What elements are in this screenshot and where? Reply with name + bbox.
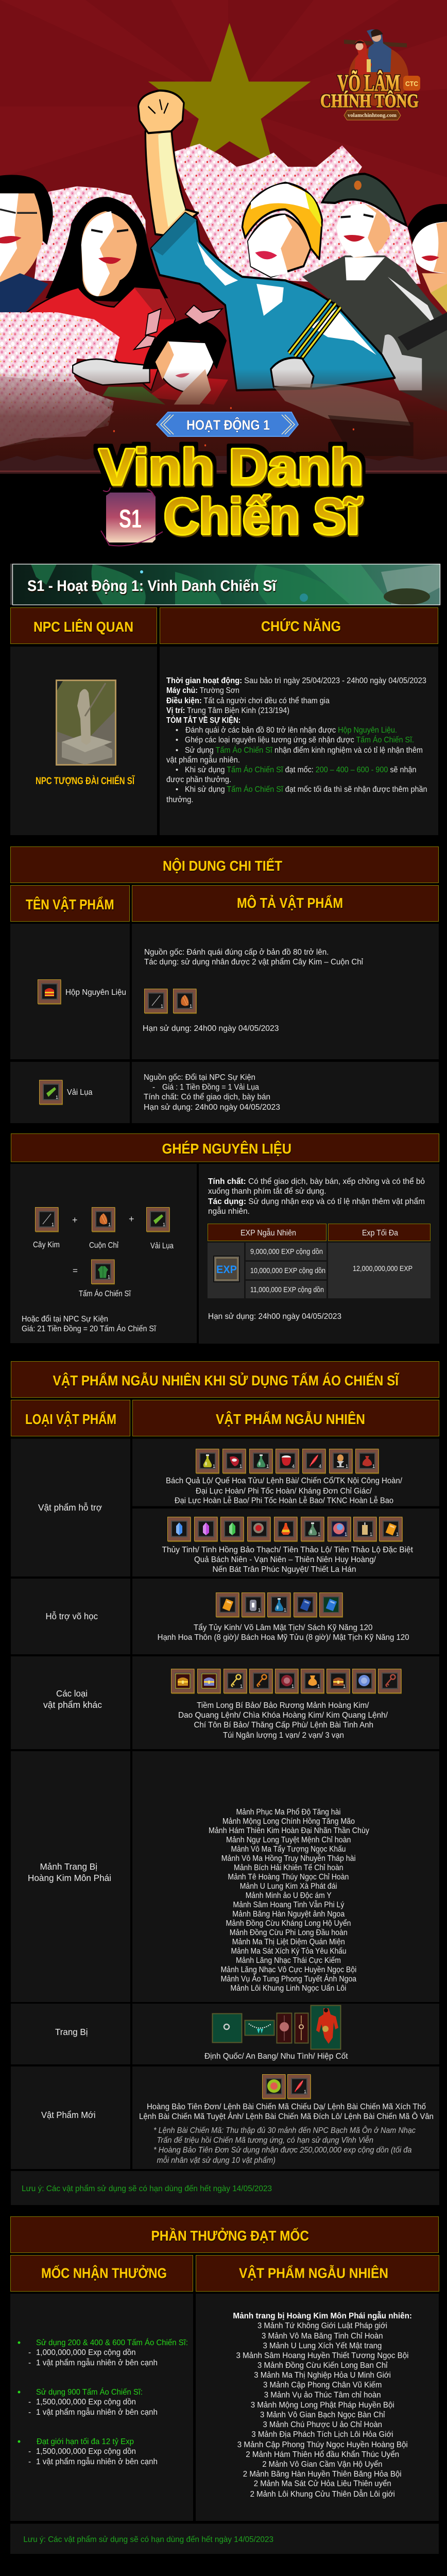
badge: S1: S1 [119,504,142,533]
icons row [196,1449,379,1474]
row: danh sách mảnh trang bị: Mảnh Vô Ma Tẩy Tượng Ngọc Khấu [231,1845,346,1854]
icon: tấm áo chiến sĩ: 1 [108,1275,110,1280]
equals: = [73,1266,78,1276]
row: danh sách mảnh trang bị: Mảnh U Lung Kim Xà Phát đái [240,1882,337,1891]
icons row: 1 [346,1464,348,1469]
EXP table: 11,000,000 EXP cộng dồn [250,1285,324,1294]
title: Chiến Sĩ: Chiến Sĩ [164,488,363,545]
row: danh sách mảnh trang bị: Mảnh Lôi Khung Linh Ngọc Uẩn Lôi [230,1984,346,1993]
icon: vải lụa [39,1080,63,1105]
italic notes: * Hoàng Bảo Tiên Đơn Sử dụng nhận được 250,000,000 exp cộng dồn (tối đa [153,2146,412,2155]
header: mô tả vật phẩm: MÔ TẢ VẬT PHẨM [237,894,343,911]
icon: vải lụa [146,1208,170,1232]
row: danh sách mảnh trang bị: Mảnh Đồng Cừu Phi Long Đầu hoàn [230,1928,348,1937]
items text: Tiềm Long Bí Bảo/ Bảo Rương Mảnh Hoàng Kim/ [197,1701,369,1710]
header: vật phẩm ngẫu nhiên khi sử dụng [11,1361,439,1397]
milestone 12 tỷ [18,2437,158,2466]
header: vật phẩm ngẫu nhiên: VẬT PHẨM NGẪU NHIÊN [216,1411,365,1427]
exchange note [22,1315,157,1333]
row: danh sách mảnh trang bị: Mảnh Phục Ma Phổ Độ Tăng hài [236,1808,341,1817]
row: danh sách mảnh trang bị: Mảnh Băng Hàn Nguyệt ảnh Ngoa [232,1910,345,1919]
panel: phần thưởng mảnh trang bị: 3 Mảnh Chú Phược U ảo Chỉ Hoàn [263,2420,382,2429]
panel: chức năng text: được phần thưởng. [166,775,231,784]
right woman [408,204,447,312]
logo Võ Lâm Chính Tông [320,29,420,120]
row: danh sách mảnh trang bị: Mảnh Ngự Long Tuyệt Mệnh Chỉ hoàn [226,1836,351,1844]
items text: Hạnh Hoa Thôn (8 giờ)/ Bách Hoa Mỹ Tửu (8 giờ)/ Mật Tịch Kỹ Năng 120 [158,1633,409,1642]
icons row: 1 [213,1464,215,1469]
italic notes [153,2126,416,2165]
items text [158,1623,409,1642]
icons row: 1 [317,1684,320,1689]
header: NPC liên quan [10,608,157,644]
icon: áo giáp [311,2005,341,2049]
panel: hộp nguyên liệu name [10,924,130,1059]
EXP table [208,1224,431,1298]
material names: Cuộn Chỉ [89,1241,118,1250]
NPC name: NPC TƯỢNG ĐÀI CHIẾN SĨ [36,775,135,787]
header: vật phẩm ngẫu nhiên: VẬT PHẨM NGẪU NHIÊN [239,2265,388,2281]
logo Võ Lâm Chính Tông: CTC [405,80,419,88]
icon: vải lụa: 1 [163,1222,165,1227]
panel: chức năng text: TÓM TẮT VỀ SỰ KIỆN: [166,716,240,725]
caption: Định Quốc/ An Bang/ Nhu Tình/ Hiệp Cốt [204,2052,348,2061]
note box 2: Lưu ý: Các vật phẩm sử dụng sẽ có hạn dùng đến hết ngày 14/05/2023 [23,2535,273,2544]
panel: phần thưởng mảnh trang bị: 2 Mảnh Băng Hàn Huyền Thiên Băng Hỏa Bội [243,2470,402,2479]
header: ghép nguyên liệu [11,1133,439,1162]
header: mốc nhận thưởng: MỐC NHẬN THƯỞNG [41,2265,167,2281]
flower bouquet [0,312,119,447]
label cell: vật phẩm mới [11,2066,130,2169]
icon: lệnh bài chiến mã [287,2074,311,2099]
label: Vải Lụa [67,1088,93,1097]
icons row: 1 [258,1607,261,1613]
EXP table: Exp Tối Đa [362,1229,398,1238]
label cell: các loại vật phẩm khác [11,1656,130,1749]
label cell: vật phẩm mới: Vật Phẩm Mới [41,2110,96,2120]
panel: phần thưởng mảnh trang bị: 3 Mảnh Cập Phong Chân Vũ Kiếm [263,2381,382,2389]
milestone 200/400/600: Sử dụng 200 & 400 & 600 Tấm Áo Chiến Sĩ: [36,2337,188,2347]
row: hỗ trợ nhóm 1 [132,1438,439,1506]
panel: phần thưởng mảnh trang bị: 3 Mảnh Đồng Cừu Kiến Long Ban Chỉ [257,2361,388,2370]
panel: chức năng text: Điều kiện: Tất cả người chơi đều có thể tham gia [166,697,330,705]
exchange note: Hoặc đổi tại NPC Sự Kiện [22,1315,108,1324]
panel: chức năng text: Máy chủ: Trường Sơn [166,686,239,695]
row: danh sách mảnh trang bị: Mảnh Tê Hoàng Thúy Ngọc Chỉ Hoàn [228,1873,349,1882]
panel: chức năng text: Khi sử dụng Tấm Áo Chiến Sĩ đạt mốc tối đa thì sẽ nhận được thêm phần [185,785,427,794]
row: các loại vật phẩm khác [132,1656,439,1749]
items text [166,1477,403,1505]
label cell: trang bị [11,2004,130,2064]
icon: cây kim: 1 [51,1222,54,1227]
icons row [171,1669,402,1694]
panel: hộp nguyên liệu description [132,924,439,1059]
material names: Vải Lụa [150,1242,174,1250]
icon: cuộn chỉ: 1 [190,1004,192,1009]
panel: chức năng text: vật phẩm ngẫu nhiên. [166,756,240,765]
header: phần thưởng đạt mốc [10,2216,439,2252]
icons row: 1 [372,1464,375,1469]
panel: hộp nguyên liệu description: Tác dụng: sử dụng nhân được 2 vật phẩm Cây Kim – Cuộn Chỉ [144,958,364,967]
milestone 12 tỷ: - [28,2458,31,2466]
panel: hộp nguyên liệu description: Hạn sử dụng: 24h00 ngày 04/05/2023 [143,1024,279,1033]
label: Hộp Nguyên Liệu [65,988,126,997]
hero illustration poster [0,0,447,546]
icons row: 1 [345,1532,347,1537]
icons row: 1 [239,1464,242,1469]
icon: lệnh bài chiến mã: 1 [304,2089,306,2094]
header: phần thưởng đạt mốc: PHẦN THƯỞNG ĐẠT MỐC [151,2227,309,2244]
italic notes: * Lệnh Bài Chiến Mã: Thu thập đủ 30 mảnh đến NPC Bạch Mã Ôn ở Nam Nhạc [153,2126,416,2135]
header: vật phẩm ngẫu nhiên khi sử dụng: VẬT PHẨM NGẪU NHIÊN KHI SỬ DỤNG TẤM ÁO CHIẾN SĨ [53,1372,400,1388]
icons row [168,1517,403,1542]
panel: công thức ghép [10,1164,197,1343]
title: Vinh Danh: Vinh Danh [99,438,363,495]
icons row: 1 [318,1532,320,1537]
EXP table: 9,000,000 EXP cộng dồn [250,1247,323,1256]
header: chức năng [160,608,438,644]
row: danh sách mảnh trang bị: Mảnh Lăng Nhạc Vô Cực Huyền Ngọc Bội [221,1965,356,1974]
milestone 12 tỷ: 1,500,000,000 Exp cộng dồn [36,2447,136,2456]
label cell: trang bị: Trang Bị [55,2027,88,2037]
panel: chức năng text: Khi sử dụng Tấm Áo Chiến Sĩ đạt mốc: 200 – 400 – 600 - 900 sẽ nhận [185,766,416,774]
note box 1: Lưu ý: Các vật phẩm sử dụng sẽ có hạn dùng đến hết ngày 14/05/2023 [22,2184,272,2193]
row: danh sách mảnh trang bị: Mảnh Ma Sát Xích Ký Tỏa Yêu Khấu [231,1947,346,1956]
panel: phần thưởng mảnh trang bị: 3 Mảnh Vô Gian Bạch Ngọc Bàn Chỉ [260,2411,385,2419]
panel: vải lụa description: Tính chất: Có thể giao dịch, bày bán [144,1093,270,1101]
milestone 12 tỷ: Đạt giới hạn tối đa 12 tỷ Exp [37,2437,134,2446]
items text: Thủy Tinh/ Tinh Hồng Bảo Thạch/ Tiên Thảo Lộ/ Tiên Thảo Lộ Đặc Biệt [162,1546,414,1554]
description: ngẫu nhiên. [208,1207,250,1216]
milestone 900 [18,2387,158,2417]
milestone 900: Sử dụng 900 Tấm Áo Chiến Sĩ: [36,2387,143,2397]
label cell: mảnh trang bị hoàng kim môn phái: Mảnh Trang Bị [40,1861,97,1872]
row: danh sách mảnh trang bị: Mảnh Đồng Cừu Kháng Long Hộ Uyển [226,1919,351,1928]
header: ghép nguyên liệu: GHÉP NGUYÊN LIỆU [162,1141,291,1157]
panel: chức năng text: thưởng. [166,795,194,804]
icon: ngọc bội [277,2013,291,2043]
panel: phần thưởng mảnh trang bị: 2 Mảnh Lôi Khung Cửu Thiên Dẫn Lôi giới [250,2490,395,2499]
row: danh sách mảnh trang bị: Mảnh Mộng Long Chính Hồng Tăng Mão [222,1817,355,1826]
panel: phần thưởng mảnh trang bị: 2 Mảnh Hám Thiên Hổ đầu Khẩn Thúc Uyển [246,2450,399,2459]
panel: vải lụa description: Hạn sử dụng: 24h00 ngày 04/05/2023 [144,1103,280,1112]
panel: phần thưởng mảnh trang bị: Mảnh trang bị Hoàng Kim Môn Phái ngẫu nhiên: [233,2312,412,2320]
result name: Tấm Áo Chiến Sĩ [79,1290,131,1298]
panel: phần thưởng mảnh trang bị: 3 Mảnh Mộng Long Phật Pháp Huyền Bội [251,2401,394,2410]
panel: phần thưởng mảnh trang bị: 3 Mảnh Sâm Hoang Huyền Thiết Tương Ngọc Bội [236,2351,409,2360]
milestone 12 tỷ: - [28,2447,31,2456]
description [208,1177,425,1216]
italic notes: Trấn để triệu hồi Chiến Mã tương ứng, có hạn sử dụng Vĩnh Viễn [157,2136,373,2145]
panel: chức năng text: Đánh quái ở các bản đồ 80 trở lên nhận được Hộp Nguyên Liệu. [185,726,397,735]
description: Tính chất: Có thể giao dịch, bày bán, xếp chồng và có thể bỏ [208,1177,425,1186]
icons row: 1 [370,1532,372,1537]
panel: phần thưởng mảnh trang bị: 3 Mảnh Địa Phách Tích Lịch Lôi Hỏa Giới [251,2430,393,2439]
icon: dây chuyền [245,2021,274,2035]
milestone 900: 1 vật phẩm ngẫu nhiên ở bên cạnh [36,2408,158,2417]
icon: cuộn chỉ [92,1208,115,1232]
items text: Đại Lực Hoàn/ Phi Tốc Hoàn/ Kháng Đơn Chỉ Giác/ [196,1487,372,1496]
label cell: mảnh trang bị hoàng kim môn phái: Hoàng Kim Môn Phái [28,1873,111,1883]
row: danh sách mảnh trang bị: Mảnh Vụ Ảo Tung Phong Tuyết Ảnh Ngoa [221,1975,357,1984]
panel: vải lụa description [132,1062,439,1123]
material names: Cây Kim [33,1241,60,1249]
header: mốc nhận thưởng [10,2256,193,2292]
icons row: 4 [319,1464,321,1469]
logo Võ Lâm Chính Tông: VÕ LÂM [337,70,400,96]
row: hỗ trợ nhóm 2 [132,1509,439,1577]
icon: cây kim [35,1208,59,1232]
label cell: hỗ trợ võ học: Hỗ trợ võ học [45,1611,98,1621]
badge: Hoạt Động 1: HOẠT ĐỘNG 1 [186,417,270,433]
header: nội dung chi tiết: NỘI DUNG CHI TIẾT [163,857,282,874]
row: danh sách mảnh trang bị: Mảnh Bích Hải Khiên Tế Chỉ hoàn [234,1863,343,1872]
header: chức năng: CHỨC NĂNG [261,618,341,634]
items text: Quả Bách Niên - Vạn Niên – Thiên Niên Huy Hoàng/ [194,1555,376,1564]
icon: cây kim [144,989,168,1014]
header: mô tả vật phẩm [132,885,439,921]
row: danh sách mảnh trang bị: Mảnh Hám Thiên Kim Hoàn Đại Nhãn Thần Chùy [209,1826,369,1835]
exchange note: Giá: 21 Tiền Đồng = 20 Tấm Áo Chiến Sĩ [22,1325,157,1333]
label cell: mảnh trang bị hoàng kim môn phái [11,1751,130,2002]
milestone 200/400/600 [18,2337,188,2367]
label cell: vật phẩm hỗ trợ: Vật phẩm hỗ trợ [38,1502,102,1513]
icons row: 1 [240,1684,243,1689]
row: danh sách mảnh trang bị: Mảnh Ma Thị Liệt Diệm Quán Miện [232,1938,345,1946]
panel: phần thưởng mảnh trang bị: 3 Mảnh Tứ Không Giới Luật Pháp giới [257,2321,387,2330]
section banner [10,564,440,605]
panel: chức năng text [160,647,438,835]
items text: Nến Bát Trân Phúc Nguyệt/ Thiết La Hán [212,1565,356,1574]
note box 1 [11,2171,439,2205]
panel: phần thưởng mảnh trang bị: 3 Mảnh Vụ ảo Thúc Tâm chỉ hoàn [264,2391,381,2400]
milestone 200/400/600: - [28,2348,31,2357]
milestone 900: - [28,2408,31,2417]
panel: NPC [10,647,157,835]
icon: vải lụa: 1 [56,1095,58,1100]
milestone 200/400/600: 1,000,000,000 Exp cộng dồn [36,2348,136,2357]
little girl with pink bows [73,305,228,404]
logo Võ Lâm Chính Tông: volamchinhtong.com [348,113,397,118]
header: vật phẩm ngẫu nhiên [133,1400,439,1436]
items text [162,1546,414,1574]
row: vật phẩm mới [132,2066,439,2169]
material names [33,1241,174,1250]
panel: phần thưởng mảnh trang bị: 3 Mảnh U Lung Xích Yết Mật trang [263,2342,382,2350]
row: hỗ trợ võ học [132,1579,439,1654]
panel: mốc nhận thưởng [10,2294,193,2521]
icons row: 1 [396,1532,399,1537]
icon: tấm áo chiến sĩ [92,1260,115,1285]
soldier [302,174,447,412]
items text [139,2103,434,2121]
items text [178,1701,388,1740]
row: danh sách mảnh trang bị: Mảnh Vô Ma Hồng Truy Nhuyễn Tháp hài [221,1854,356,1863]
header: tên vật phẩm [10,885,130,921]
panel: phần thưởng mảnh trang bị [196,2294,439,2521]
icon: EXP card: EXP [216,1264,237,1276]
items text: Túi Ngân lượng 1 vạn/ 2 vạn/ 3 vạn [223,1731,344,1740]
panel: vải lụa name [10,1062,130,1123]
section banner: S1 - Hoạt Động 1: Vinh Danh Chiến Sĩ [27,578,277,595]
panel: chức năng text: Thời gian hoạt động: Sau bảo trì ngày 25/04/2023 - 24h00 ngày 04/05/2023 [166,676,426,685]
header: vật phẩm ngẫu nhiên [196,2256,439,2292]
icon: hộp nguyên liệu [38,980,61,1005]
items text: Bách Quả Lộ/ Quế Hoa Tửu/ Lệnh Bài/ Chiến Cổ/TK Nội Công Hoàn/ [166,1477,403,1485]
NPC statue image [57,680,115,765]
icons row: 1 [266,1464,269,1469]
items text: Dao Quang Lệnh/ Chìa Khóa Hoàng Kim/ Kim Quang Lệnh/ [178,1711,388,1720]
icon: EXP card [214,1256,239,1282]
milestone 900: - [28,2398,31,2406]
icon: cây kim: 1 [161,1004,163,1009]
panel: chức năng text: Sử dụng Tấm Áo Chiến Sĩ nhận điểm kinh nghiệm và có tỉ lệ nhận thêm [185,746,423,755]
lower fade [0,369,447,474]
panel: phần thưởng mảnh trang bị: 3 Mảnh Ma Thị Nghiệp Hỏa U Minh Giới [254,2371,391,2380]
panel: phần thưởng mảnh trang bị: 2 Mảnh Vô Gian Cầm Vận Hộ Uyển [262,2460,382,2469]
badge: Hoạt Động 1 [157,412,298,436]
plus: + [72,1215,78,1225]
description: xuống thanh phím tắt để sử dụng. [208,1187,326,1196]
label cell: hỗ trợ võ học [11,1579,130,1654]
worker with raised fist [138,91,395,391]
header: NPC liên quan: NPC LIÊN QUAN [33,619,133,635]
label cell: các loại vật phẩm khác: vật phẩm khác [43,1700,102,1710]
panel: vải lụa description: Giá : 1 Tiền Đồng = 1 Vải Lụa [162,1083,259,1092]
logo Võ Lâm Chính Tông: CHÍNH TÔNG [320,90,419,112]
items text: Chí Tôn Bí Bảo/ Thăng Cấp Phù/ Lệnh Bài Tinh Anh [194,1721,373,1730]
note box 2 [10,2523,439,2554]
badge: S1 [101,487,163,546]
header: nội dung chi tiết [10,847,439,883]
panel: vải lụa description: Nguồn gốc: Đổi tại NPC Sự Kiện [144,1073,255,1082]
panel: phần thưởng mảnh trang bị: 3 Mảnh Vô Ma Băng Tinh Chỉ Hoàn [262,2332,383,2341]
icons row: 1 [291,1684,294,1689]
row: trang bị [132,2004,439,2064]
milestone 200/400/600: - [28,2359,31,2367]
items text: Tẩy Tủy Kinh/ Võ Lâm Mật Tịch/ Sách Kỹ Năng 120 [194,1623,373,1632]
row: danh sách mảnh trang bị [132,1751,439,2002]
icon: hoàng bảo tiên đơn [263,2074,286,2099]
panel: chức năng text: Ghép các loại nguyên liệu tương ứng sẽ nhận được Tấm Áo Chiến Sĩ. [185,736,414,744]
milestone 12 tỷ: 1 vật phẩm ngẫu nhiên ở bên cạnh [36,2458,158,2466]
row: danh sách mảnh trang bị: Mảnh Sâm Hoang Tinh Vẫn Phi Lý [233,1901,345,1909]
milestone 900: 1,500,000,000 Exp cộng dồn [36,2398,136,2406]
icons row: 1 [343,1684,346,1689]
row: danh sách mảnh trang bị: Mảnh Lăng Nhạc Thái Cực Kiếm [236,1956,341,1965]
panel: vải lụa description: - [152,1083,155,1092]
yellow star [148,23,311,177]
icon: cuộn chỉ [173,989,197,1014]
header: loại vật phẩm: LOẠI VẬT PHẨM [25,1411,116,1427]
panel: hộp nguyên liệu description: Nguồn gốc: Đánh quái đúng cấp ở bản đồ 80 trở lên. [144,948,329,957]
expiry: Hạn sử dụng: 24h00 ngày 04/05/2023 [208,1312,341,1321]
EXP table: 10,000,000 EXP cộng dồn [250,1266,325,1275]
milestone 200/400/600: 1 vật phẩm ngẫu nhiên ở bên cạnh [36,2359,158,2367]
EXP table: EXP Ngẫu Nhiên [240,1229,296,1238]
items text: Đại Lực Hoàn Lễ Bao/ Phi Tốc Hoàn Lễ Bao/ TKNC Hoàn Lễ Bao [175,1496,393,1505]
items text: Hoàng Bảo Tiên Đơn/ Lệnh Bài Chiến Mã Chiếu Dạ/ Lệnh Bài Chiến Mã Xích Thố [147,2103,426,2111]
icon: cuộn chỉ: 1 [108,1222,111,1227]
panel: phần thưởng mảnh trang bị: 2 Mảnh Ma Sát Cử Hỏa Liêu Thiên uyển [254,2479,391,2488]
row: danh sách mảnh trang bị: Mảnh Minh ảo U Độc ám Y [246,1891,332,1900]
description: Tác dụng: Sử dụng nhận exp và có tỉ lệ nhận thêm vật phẩm [208,1197,425,1206]
icon: ngọc bội 2 [295,2013,308,2043]
EXP table: 12,000,000,000 EXP [353,1264,412,1273]
icons row: 4 [292,1464,295,1469]
panel: chức năng text: Vị trí: Trung Tâm Biện Kinh (213/194) [166,706,289,715]
panel: thông tin tấm áo chiến sĩ [199,1164,439,1344]
man with glasses [0,175,53,328]
plus: + [129,1214,134,1224]
header: loại vật phẩm [11,1400,130,1436]
items text: Lệnh Bài Chiến Mã Tuyệt Ảnh/ Lệnh Bài Chiến Mã Đích Lô/ Lệnh Bài Chiến Mã Ô Vân [139,2112,434,2121]
label cell: các loại vật phẩm khác: Các loại [56,1688,88,1699]
icons row [216,1593,343,1618]
cherry blossom background [171,144,421,284]
italic notes: mỗi nhân vật sử dụng 10 vật phẩm) [157,2156,276,2165]
icons row: 1 [284,1607,286,1613]
header: tên vật phẩm: TÊN VẬT PHẨM [26,896,114,912]
woman in red [24,197,175,391]
panel: phần thưởng mảnh trang bị: 3 Mảnh Cập Phong Thúy Ngọc Huyền Hoàng Bội [237,2441,408,2449]
label cell: vật phẩm hỗ trợ [11,1438,130,1577]
icon: nhẫn [212,2013,242,2042]
